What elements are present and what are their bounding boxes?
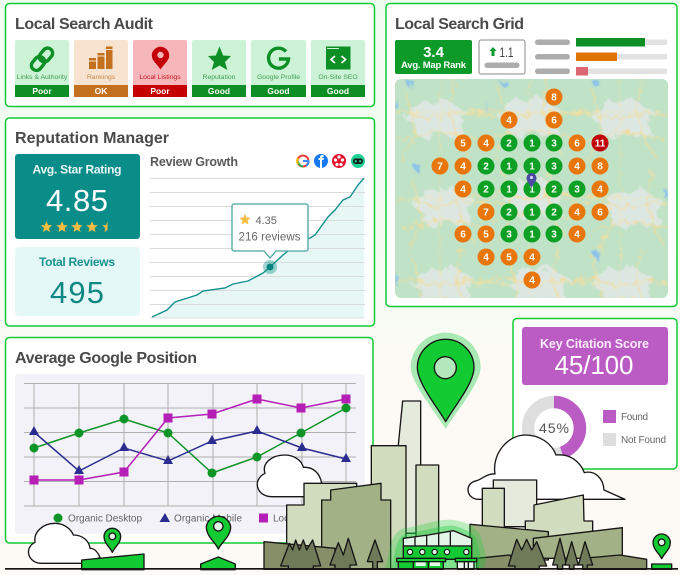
- heading: local search audit: Local Search Audit: [15, 16, 154, 33]
- chart: position line chart: [15, 374, 365, 534]
- rank dots: 7: [483, 208, 489, 218]
- tile: on site seo: On-Site SEO: [318, 74, 358, 81]
- rank dots: 1: [529, 208, 535, 218]
- legend: [54, 513, 297, 524]
- tile: links and authority: Poor: [32, 86, 52, 96]
- rank dots: [432, 88, 608, 288]
- tile: google profile: [251, 40, 306, 97]
- card: average star rating: 4.85: [46, 183, 108, 218]
- building: right back blocks: [470, 480, 647, 569]
- rank dots: 4: [574, 162, 580, 172]
- chart: donut 45 percent: [528, 402, 580, 454]
- legend: found: Found: [621, 412, 648, 423]
- legend: Organic Mobile: [174, 514, 242, 524]
- rank dots: 2: [551, 184, 557, 196]
- tile: reputation: Good: [208, 86, 230, 96]
- rank dots: 4: [460, 184, 466, 196]
- card: score: 45/100: [554, 350, 634, 380]
- card: average star rating: Avg. Star Rating: [32, 162, 122, 176]
- chart: review growth line: [150, 178, 365, 318]
- panel: local search grid: [385, 2, 678, 308]
- card: score: Key Citation Score: [540, 337, 649, 351]
- icon: pin two: [206, 516, 231, 549]
- card: average map rank: [395, 40, 472, 74]
- rank dots: 4: [506, 116, 512, 126]
- cloud: left: [28, 523, 100, 563]
- building: left light block: [287, 483, 357, 569]
- building: green storefront: [385, 520, 486, 569]
- building: left green roof: [82, 554, 144, 570]
- panel: local search audit: [6, 4, 374, 106]
- tile: links and authority: [15, 40, 69, 97]
- legend: not found: Not Found: [621, 435, 666, 446]
- rank dots: 3: [551, 230, 557, 240]
- rank dots: 4: [460, 162, 466, 172]
- legend: Local: [273, 514, 297, 524]
- rank dots: 3: [551, 162, 557, 172]
- rank dots: 4: [483, 252, 489, 264]
- rank dots: 8: [551, 92, 557, 104]
- trees: left: [281, 538, 383, 569]
- bar list: rank distribution: [535, 38, 667, 76]
- tile: on site seo: Good: [327, 86, 349, 96]
- cloud: right: [468, 435, 625, 499]
- legend: found: [603, 410, 648, 423]
- icon: map pin: [526, 173, 536, 188]
- chart: donut 45 percent: 45%: [539, 420, 569, 436]
- icon: small location pin right: [652, 534, 672, 569]
- tile: links and authority: Links & Authority: [17, 74, 68, 81]
- rank dots: 2: [483, 162, 489, 172]
- illustration: city skyline: [257, 333, 672, 569]
- rank dots: 1: [529, 138, 535, 150]
- rating stars: [41, 221, 108, 232]
- rank dots: 3: [574, 184, 580, 196]
- rank dots: 11: [595, 138, 606, 150]
- rank dots: 4: [597, 184, 603, 196]
- tile: rankings: Rankings: [87, 74, 116, 81]
- rank dots: 2: [506, 138, 512, 150]
- building: left green block: [322, 483, 391, 569]
- rank dots: 7: [437, 162, 443, 172]
- rank dots: 1: [529, 230, 535, 240]
- card: average map rank: Avg. Map Rank: [401, 60, 467, 71]
- legend: Organic Desktop: [68, 514, 142, 524]
- card: rank change: 1.1: [500, 44, 514, 60]
- card: total reviews: [15, 247, 140, 316]
- tile: local listings: [133, 40, 187, 97]
- rank dots: 6: [551, 116, 557, 126]
- tile: rankings: [74, 40, 128, 97]
- rank dots: 2: [483, 184, 489, 196]
- heading: reputation manager: Reputation Manager: [15, 130, 169, 147]
- rank dots: 1: [506, 162, 512, 172]
- icon: review platforms: [297, 154, 365, 168]
- tile: local listings: Local Listings: [139, 74, 181, 81]
- tile: google profile: Google Profile: [257, 74, 300, 81]
- rank dots: 2: [506, 208, 512, 218]
- building: slim tower: [416, 465, 439, 538]
- series: organic mobile: [29, 425, 351, 474]
- trees: right: [508, 538, 593, 569]
- series: local: [30, 394, 350, 484]
- rank dots: 1: [529, 184, 535, 196]
- ground line: [5, 568, 678, 570]
- panel: key citation score: [513, 318, 677, 469]
- tile: reputation: Reputation: [203, 74, 236, 81]
- rank dots: 6: [460, 230, 466, 240]
- building: tall tower: [398, 401, 421, 533]
- map: rank grid: [395, 79, 668, 298]
- card: average map rank: 3.4: [423, 44, 445, 61]
- rank dots: 4: [574, 208, 580, 218]
- rank dots: 4: [529, 252, 535, 264]
- card: total reviews: Total Reviews: [39, 255, 115, 269]
- tile: google profile: Good: [267, 86, 290, 96]
- rank dots: 5: [460, 138, 466, 150]
- callout: tooltip 4.35: 4.35: [256, 215, 277, 227]
- illustration: left foreground: [28, 516, 235, 570]
- callout: tooltip 4.35: 216 reviews: [238, 232, 301, 244]
- rank dots: 8: [597, 162, 603, 172]
- building: mid tower: [371, 446, 406, 569]
- card: score: [522, 327, 668, 385]
- series: organic desktop: [30, 404, 350, 478]
- cloud: middle: [257, 455, 337, 497]
- tile: local listings: Poor: [150, 86, 170, 96]
- card: total reviews: 495: [50, 275, 104, 310]
- legend: not found: [603, 433, 666, 446]
- tile: reputation: [192, 40, 246, 97]
- rank dots: 5: [483, 230, 489, 240]
- panel: average google position: [6, 338, 373, 543]
- heading: review growth: Review Growth: [150, 155, 238, 169]
- rank dots: 5: [506, 252, 512, 264]
- heading: average google position: Average Google Position: [15, 350, 197, 367]
- rank dots: 4: [529, 276, 535, 286]
- rank dots: 3: [506, 230, 512, 240]
- tile: rankings: OK: [95, 86, 108, 96]
- rank dots: 4: [574, 230, 580, 240]
- icon: pin one: [104, 528, 121, 552]
- rank dots: 3: [551, 138, 557, 150]
- tile: on site seo: [311, 40, 365, 97]
- rank dots: 1: [506, 184, 512, 196]
- rank dots: 1: [529, 162, 535, 172]
- building: left olive block: [264, 542, 335, 569]
- rank dots: 4: [483, 138, 489, 150]
- callout: tooltip 4.35: [232, 204, 308, 258]
- rank dots: 6: [574, 138, 580, 150]
- building: left green house: [201, 557, 235, 570]
- rank dots: 6: [597, 208, 603, 218]
- card: rank change: [479, 40, 525, 74]
- heading: local search grid: Local Search Grid: [395, 16, 524, 33]
- rank dots: 2: [551, 208, 557, 218]
- card: average star rating: [15, 154, 140, 239]
- icon: large location pin: [411, 333, 481, 429]
- panel: reputation manager: [6, 118, 374, 326]
